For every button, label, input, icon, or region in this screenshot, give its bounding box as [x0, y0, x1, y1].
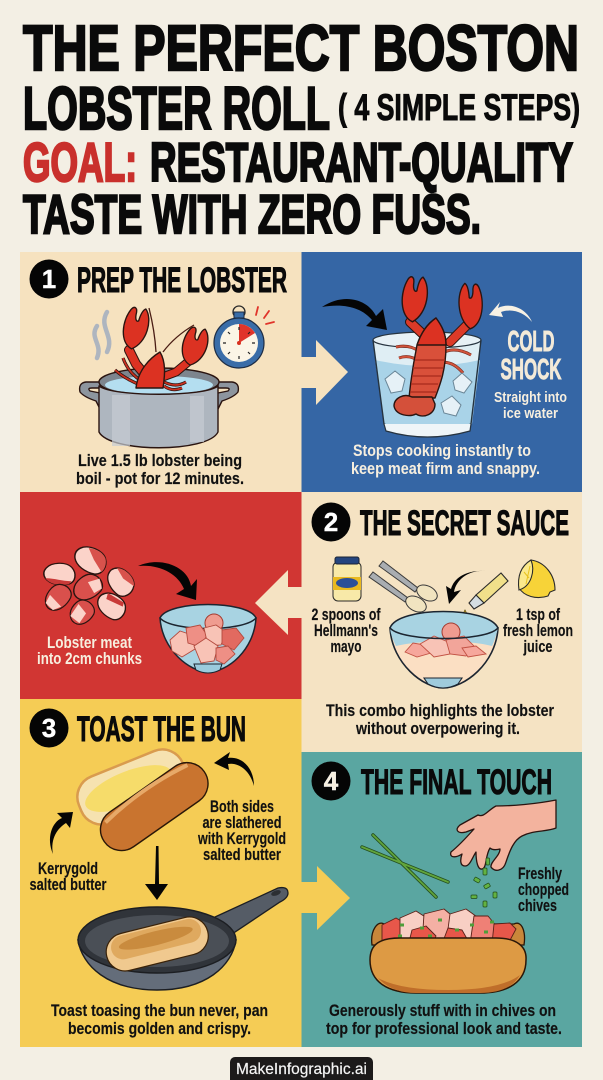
cold shock note: Straight into [494, 389, 567, 406]
step 4 caption [326, 1001, 562, 1038]
step 1 number badge: 1 [42, 264, 56, 294]
icon: stopwatch [214, 306, 274, 368]
step 1 caption: Live 1.5 lb lobster being [78, 451, 242, 470]
panel: cold shock [302, 252, 582, 492]
step 2 number badge [312, 502, 350, 542]
mayo label: 2 spoons of [312, 605, 381, 624]
step 2 caption: This combo highlights the lobster [326, 701, 554, 720]
arrow: chunks to bowl [138, 562, 197, 600]
panel: step 2 the secret sauce [255, 492, 582, 752]
arrow: bun to final touch [302, 866, 350, 930]
chives label: chives [518, 896, 557, 915]
icon: sauce bowl [390, 612, 498, 688]
chunks caption: into 2cm chunks [37, 649, 142, 668]
icon: lobster in ice water glass [373, 276, 483, 437]
cold shock caption: keep meat firm and snappy. [351, 459, 540, 478]
footer badge [230, 1057, 373, 1080]
chunks caption: Lobster meat [47, 633, 132, 652]
icon: lobster chunks [40, 540, 138, 628]
icon: chives [362, 835, 448, 897]
step 3 caption: Toast toasing the bun never, pan [51, 1001, 268, 1020]
step 3 number badge: 3 [42, 713, 56, 743]
chives label: chopped [518, 880, 569, 899]
icon: lemon [518, 560, 555, 598]
arrow: cold shock pointer [489, 302, 532, 322]
step 3 caption: becomis golden and crispy. [68, 1019, 251, 1038]
step 1 caption [76, 451, 244, 488]
arrow: sauce to chunks [255, 570, 302, 635]
butter label left [30, 859, 107, 894]
icon: pot with lobster [80, 306, 238, 448]
icon: hand [451, 800, 556, 870]
icon: spoons [369, 561, 440, 615]
step 3 number badge [30, 708, 68, 748]
step 4 caption: Generously stuff with in chives on [329, 1001, 556, 1020]
cold shock caption [351, 441, 540, 478]
lemon label: fresh lemon [503, 621, 573, 640]
step 4 number badge: 4 [324, 766, 339, 796]
icon: lemon juice bottle [469, 573, 508, 609]
butter label right: with Kerrygold [197, 829, 286, 848]
step 1 caption: boil - pot for 12 minutes. [76, 469, 244, 488]
step 4 number badge [312, 762, 350, 800]
title: GOAL: [23, 131, 137, 193]
icon: bowl of chunks [160, 604, 256, 673]
cold shock heading [500, 326, 562, 386]
arrow: butter pointer [50, 812, 73, 854]
chunks caption [37, 633, 142, 668]
step 2 number badge: 2 [324, 507, 338, 537]
step 3 caption [51, 1001, 268, 1038]
icon: buttered bun [71, 743, 216, 859]
cold shock note: ice water [503, 405, 558, 422]
icon: mayo jar [333, 557, 361, 601]
arrow: lemon into bowl [446, 571, 485, 604]
panel: step 4 the final touch [302, 752, 582, 1047]
footer badge: MakeInfographic.ai [236, 1061, 367, 1078]
chives label: Freshly [518, 864, 562, 883]
panel: lobster meat chunks [20, 492, 302, 699]
step 1 heading: PREP THE LOBSTER [77, 261, 287, 300]
step 4 caption: top for professional look and taste. [326, 1019, 562, 1038]
lemon label: 1 tsp of [516, 605, 560, 624]
title [23, 12, 580, 245]
cold shock heading: COLD [508, 326, 554, 358]
mayo label: mayo [330, 637, 362, 656]
mayo label [312, 605, 381, 656]
step 2 caption [326, 701, 554, 738]
cold shock note [494, 389, 567, 422]
icon: falling chive pieces [471, 858, 497, 907]
lemon label [503, 605, 573, 656]
butter label right: Both sides [210, 797, 274, 816]
cold shock caption: Stops cooking instantly to [353, 441, 531, 460]
butter label right [197, 797, 286, 864]
icon: steam [94, 312, 109, 358]
chives label [518, 864, 569, 915]
step 3 heading: TOAST THE BUN [77, 710, 246, 749]
arrow: butter both sides [214, 752, 254, 786]
icon: finished lobster roll [370, 909, 526, 993]
arrow: bun to pan [145, 846, 168, 900]
butter label left: salted butter [30, 875, 107, 894]
panel: step 3 toast the bun [20, 699, 302, 1047]
cold shock heading: SHOCK [500, 354, 562, 386]
arrow: into glass [322, 299, 387, 330]
butter label right: salted butter [203, 845, 281, 864]
icon: frying pan with toasted bun [78, 888, 288, 990]
butter label left: Kerrygold [38, 859, 98, 878]
arrow: step 1 to cold shock [302, 340, 348, 405]
mayo label: Hellmann's [314, 621, 378, 640]
icon: lemon drop [460, 610, 470, 626]
panel: step 1 prep the lobster [20, 252, 302, 492]
title: LOBSTER ROLL [23, 75, 330, 142]
step 1 number badge [30, 260, 68, 298]
butter label right: are slathered [202, 813, 282, 832]
lemon label: juice [523, 637, 552, 656]
step 2 caption: without overpowering it. [355, 719, 520, 738]
